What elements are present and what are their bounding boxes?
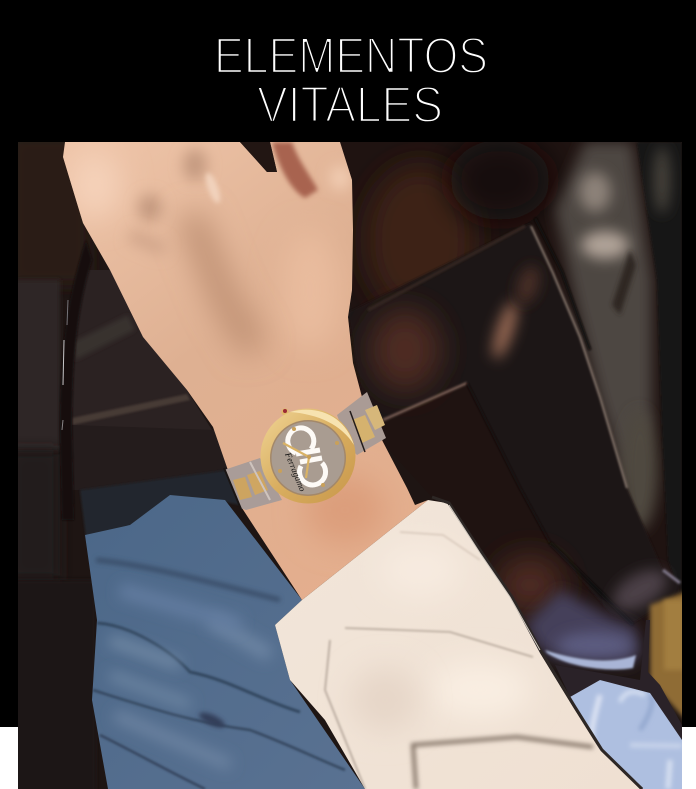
wristwatch bbox=[224, 392, 386, 510]
blurred gold background at right edge bbox=[647, 590, 682, 720]
cream leather sleeve bbox=[270, 495, 645, 789]
watch case bbox=[260, 408, 356, 504]
dark navy jacket band above blue quilt bbox=[80, 470, 240, 538]
watch hands bbox=[283, 443, 309, 457]
watch bracelet, right bbox=[337, 392, 386, 455]
title: VITALES bbox=[257, 76, 443, 133]
jacket: upper left background bbox=[18, 142, 227, 574]
title bbox=[214, 27, 488, 133]
hour markers bbox=[278, 427, 339, 487]
watch crown bbox=[281, 408, 289, 416]
title: ELEMENTOS bbox=[214, 27, 488, 84]
dark piping between quilted panels bbox=[555, 620, 682, 745]
jacket: black strap with highlight bbox=[60, 240, 92, 520]
brand script on dial: Ferragamo bbox=[283, 450, 308, 493]
hand and wrist bbox=[55, 142, 435, 612]
sleeve piping edge bbox=[432, 497, 642, 789]
jacket: pocket flap bbox=[348, 218, 680, 625]
jacket: lower purple shadow zone bbox=[496, 555, 640, 669]
watch bracelet, left bbox=[224, 458, 282, 510]
blue quilted jacket bbox=[80, 490, 380, 789]
dark notch shadow between fingers bbox=[240, 142, 277, 172]
infinity logo bbox=[288, 428, 326, 485]
watch dial bbox=[270, 420, 346, 496]
light blue quilted panel, lower right bbox=[570, 680, 682, 789]
jacket: right leather panel bbox=[354, 142, 682, 590]
